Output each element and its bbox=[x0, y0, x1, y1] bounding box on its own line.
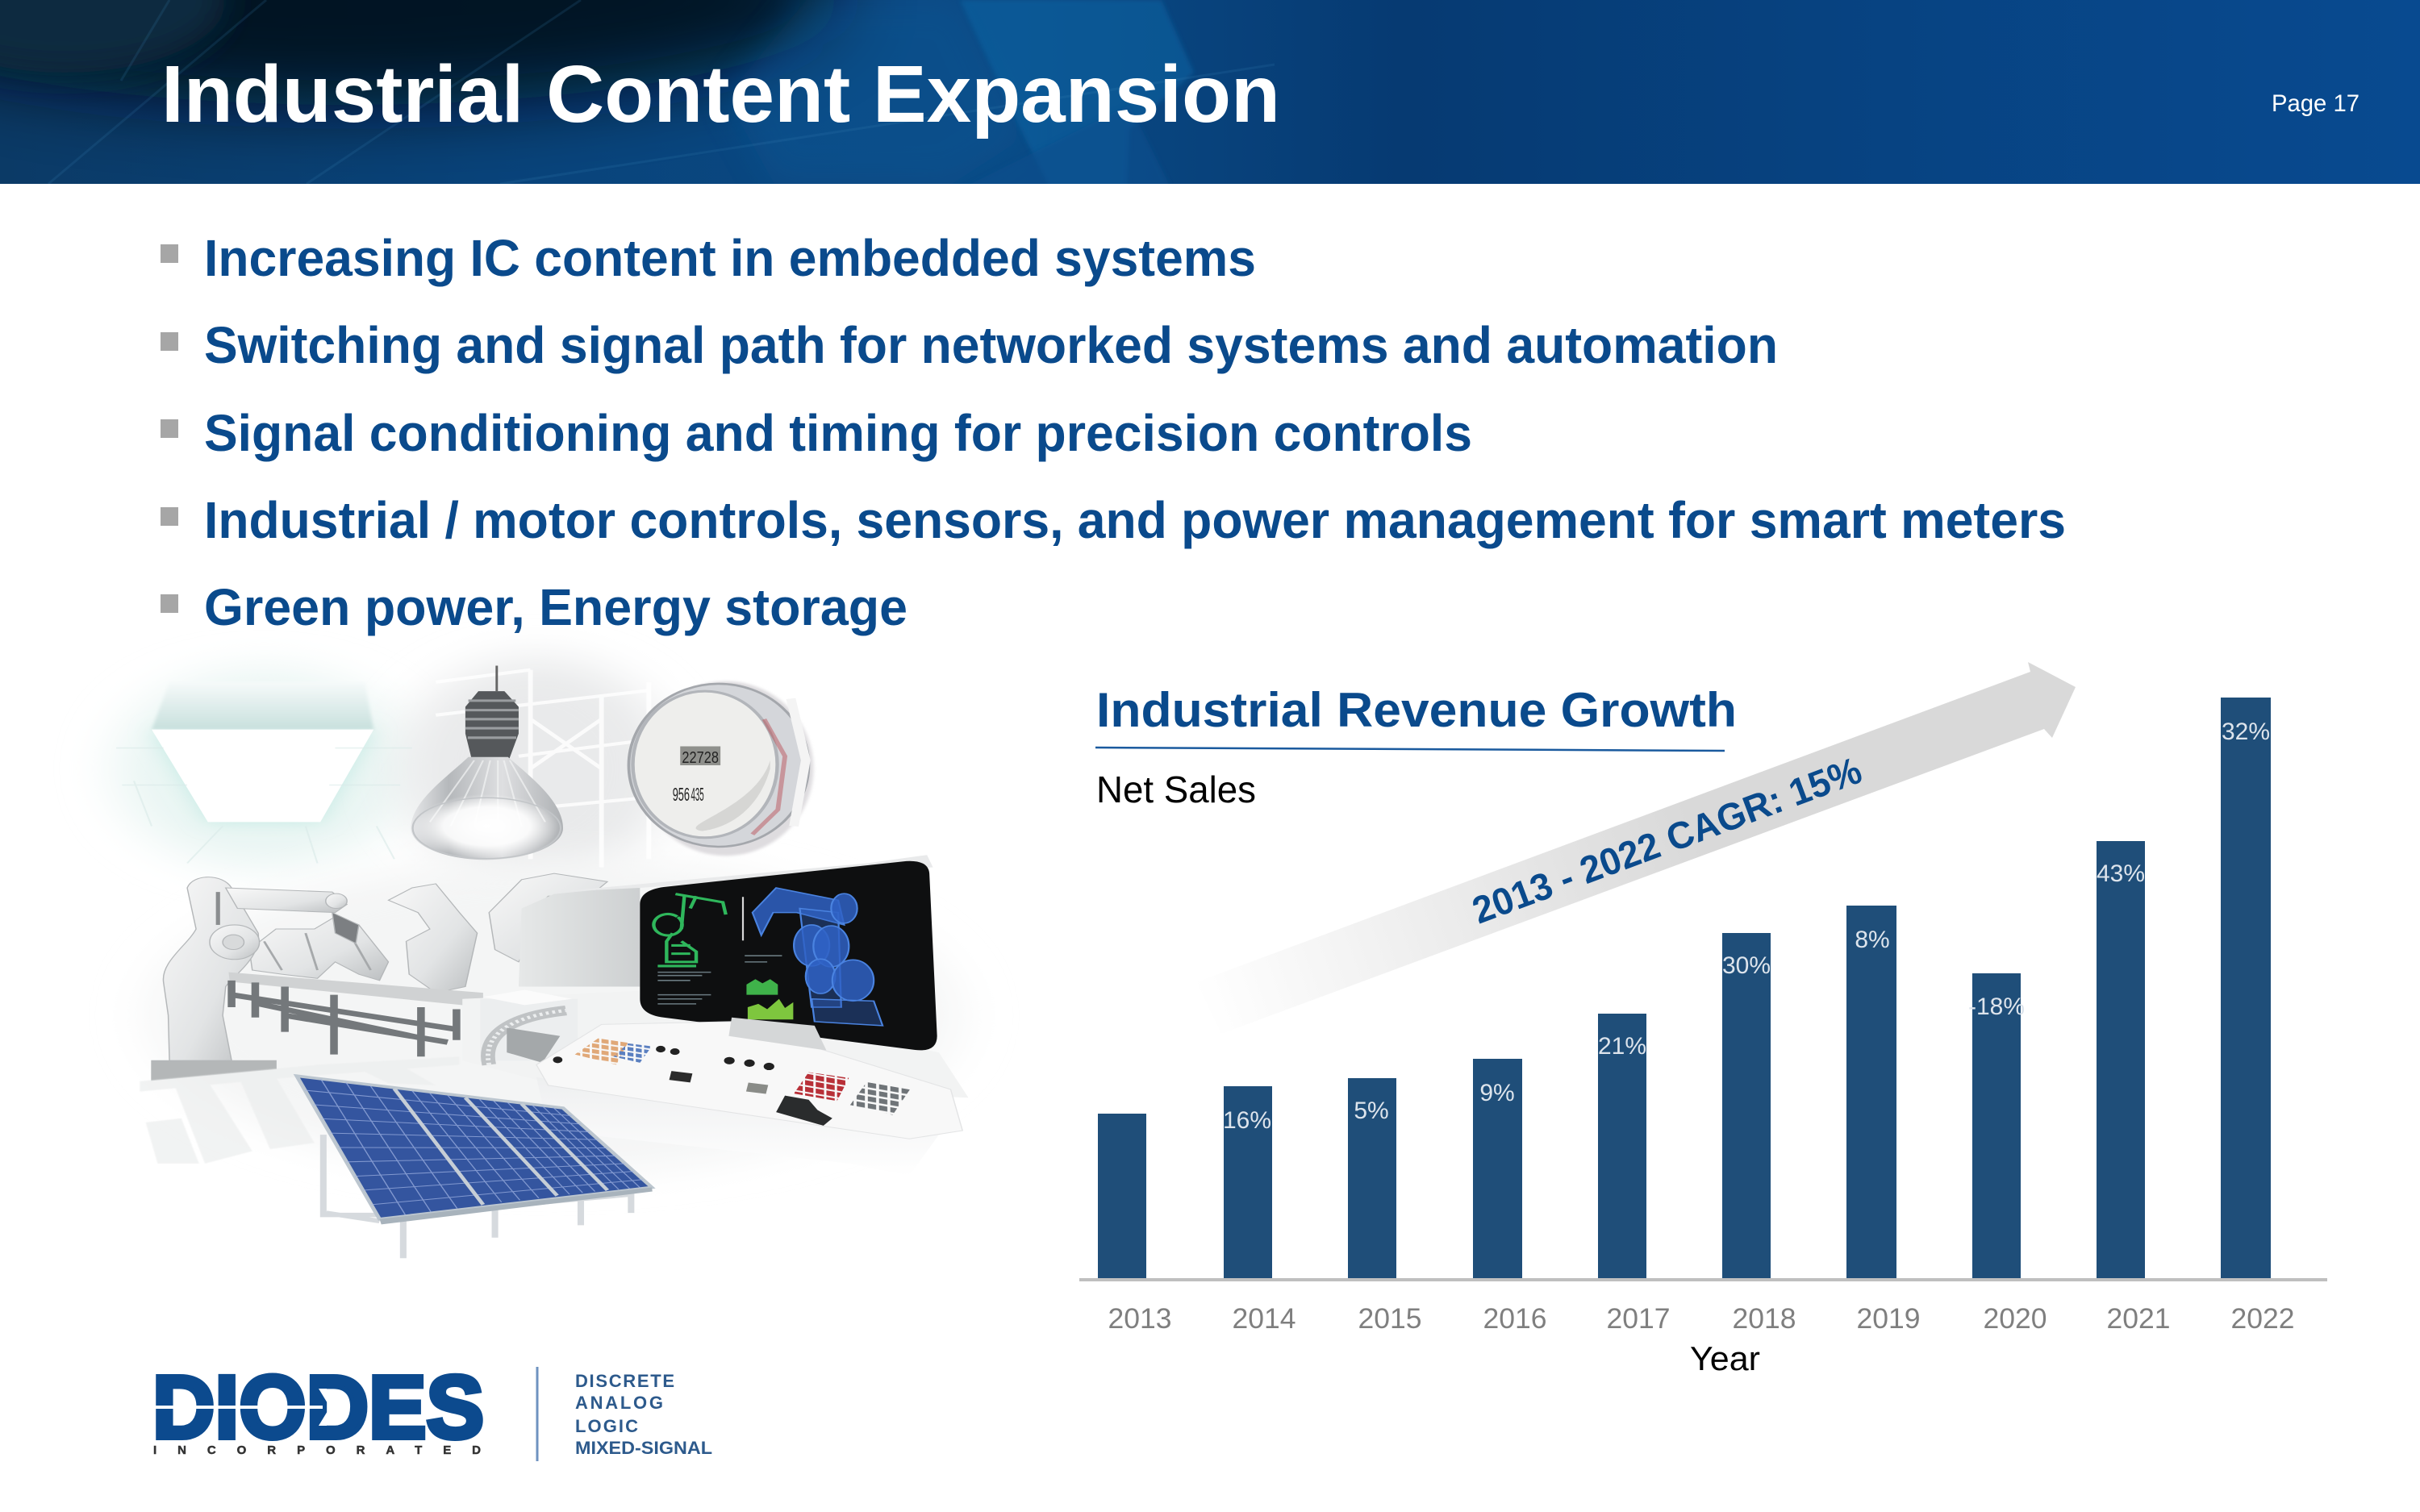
year labels: 2022 bbox=[2231, 1302, 2294, 1335]
robotic arms on assembly line bbox=[152, 873, 607, 1081]
tagline bbox=[575, 1371, 712, 1458]
data labels: 5% bbox=[1354, 1098, 1389, 1124]
data labels: 21% bbox=[1598, 1033, 1646, 1060]
divider bbox=[536, 1367, 539, 1461]
year labels: 2021 bbox=[2107, 1302, 2170, 1335]
year labels: 2016 bbox=[1483, 1302, 1546, 1335]
bullet 4: Industrial / motor controls, sensors, and power management for smart meters bbox=[204, 491, 2066, 549]
CAGR label: 2013 - 2022 CAGR: 15% bbox=[1467, 748, 1867, 931]
year labels: 2015 bbox=[1358, 1302, 1421, 1335]
tagline: LOGIC bbox=[575, 1416, 638, 1436]
year labels: 2020 bbox=[1984, 1302, 2047, 1335]
smart meter bbox=[628, 681, 813, 856]
wordmark: DIODES bbox=[152, 1358, 484, 1457]
screen text lines bbox=[657, 956, 782, 1004]
year labels: 2018 bbox=[1733, 1302, 1796, 1335]
tagline: DISCRETE bbox=[575, 1371, 674, 1391]
bullet list bbox=[161, 229, 2066, 636]
smart meter: 435 bbox=[691, 785, 704, 806]
year labels: 2019 bbox=[1857, 1302, 1920, 1335]
chart subtitle: Net Sales bbox=[1096, 768, 1256, 810]
monitor with robot diagnostics bbox=[640, 861, 937, 1050]
company logo bbox=[152, 1358, 712, 1461]
control machine body bbox=[462, 855, 969, 1098]
bullet 2: Switching and signal path for networked systems and automation bbox=[204, 316, 1778, 374]
year labels bbox=[1108, 1302, 2294, 1335]
bars bbox=[1098, 698, 2271, 1279]
data labels: 43% bbox=[2097, 860, 2145, 887]
wordmark: INCORPORATED bbox=[153, 1443, 481, 1457]
data labels: 32% bbox=[2222, 719, 2270, 745]
floor rollers bbox=[140, 1056, 460, 1164]
control panel with buttons bbox=[536, 1018, 962, 1176]
x axis title: Year bbox=[1690, 1339, 1760, 1377]
structural truss backdrop bbox=[436, 670, 649, 868]
bullet 1: Increasing IC content in embedded systems bbox=[204, 229, 1256, 287]
green charts bbox=[746, 979, 778, 995]
growth arrow bbox=[1196, 662, 2076, 1034]
bullet 3: Signal conditioning and timing for precision controls bbox=[204, 404, 1472, 462]
background washes bbox=[116, 657, 957, 1172]
illustration: industrial applications collage bbox=[116, 657, 969, 1258]
data labels: 9% bbox=[1479, 1080, 1515, 1106]
year labels: 2014 bbox=[1233, 1302, 1296, 1335]
green robot wireframe bbox=[653, 894, 726, 966]
bar chart bbox=[1079, 698, 2327, 1377]
pendant high-bay lamp bbox=[411, 666, 563, 860]
year labels: 2017 bbox=[1607, 1302, 1670, 1335]
bullet 5: Green power, Energy storage bbox=[204, 578, 908, 636]
axis bbox=[1079, 1278, 2327, 1281]
year labels: 2013 bbox=[1108, 1302, 1171, 1335]
smart meter: 956 bbox=[673, 785, 690, 806]
solar panel array bbox=[297, 1076, 653, 1258]
data labels: 8% bbox=[1855, 927, 1890, 953]
data labels bbox=[1223, 719, 2270, 1134]
ceiling light panel bbox=[116, 682, 412, 863]
page number: Page 17 bbox=[2272, 90, 2360, 117]
tagline: ANALOG bbox=[575, 1393, 663, 1413]
mid cluster bbox=[249, 917, 389, 981]
data labels: 16% bbox=[1223, 1107, 1271, 1134]
data labels: 30% bbox=[1722, 952, 1771, 979]
chart heading: Industrial Revenue Growth bbox=[1096, 683, 1737, 737]
blue robot wireframe bbox=[753, 888, 882, 1026]
main robot bbox=[163, 877, 258, 1060]
far robots bbox=[489, 873, 607, 962]
tagline: MIXED-SIGNAL bbox=[575, 1438, 712, 1458]
smart meter: 22728 bbox=[682, 748, 719, 767]
conveyor line bbox=[228, 973, 483, 1056]
data labels: -18% bbox=[1968, 993, 2025, 1020]
title: Industrial Content Expansion bbox=[161, 49, 1280, 140]
header banner bbox=[0, 0, 2420, 184]
